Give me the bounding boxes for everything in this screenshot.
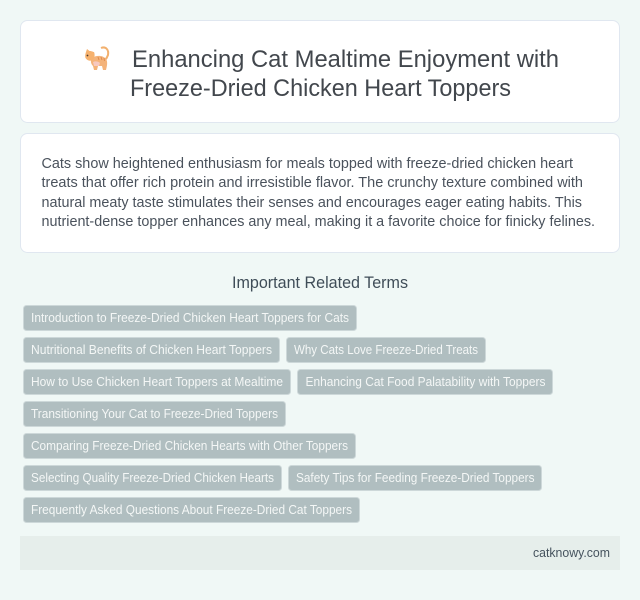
tag (24, 370, 290, 394)
panel: title header (20, 20, 620, 122)
tag (24, 338, 280, 362)
tag list: related terms (24, 306, 552, 522)
tag (24, 306, 356, 330)
summary text: Cats show heightened enthusiasm for meals topped with freeze-dried chicken heart (42, 155, 574, 172)
icon: cat (85, 47, 108, 70)
footer bar (20, 536, 620, 570)
summary text: treats that offer rich protein and irresistible flavor. The crunchy texture combined with (42, 174, 583, 191)
tag: Nutritional Benefits of Chicken Heart Toppers (31, 343, 272, 357)
tag (288, 466, 542, 490)
tag (298, 370, 552, 394)
tag: Frequently Asked Questions About Freeze-Dried Cat Toppers (31, 503, 352, 517)
tag: Enhancing Cat Food Palatability with Toppers (306, 375, 546, 389)
tag (24, 466, 282, 490)
tag (286, 338, 486, 362)
title text (130, 46, 559, 102)
tag: How to Use Chicken Heart Toppers at Mealtime (31, 375, 283, 389)
tag: Introduction to Freeze-Dried Chicken Heart Toppers for Cats (31, 311, 349, 325)
summary text: natural meaty taste stimulates their senses and encourages eager eating habits. This (42, 194, 582, 211)
tag (24, 434, 356, 458)
tag: Selecting Quality Freeze-Dried Chicken Hearts (31, 471, 274, 485)
heading: related terms: Important Related Terms (232, 274, 408, 292)
tag: Comparing Freeze-Dried Chicken Hearts with Other Toppers (31, 439, 348, 453)
tag (24, 498, 360, 522)
tag (24, 402, 286, 426)
title text: Freeze-Dried Chicken Heart Toppers (130, 75, 511, 102)
tag: Transitioning Your Cat to Freeze-Dried Toppers (31, 407, 278, 421)
panel: summary paragraph (20, 134, 620, 252)
tag: Why Cats Love Freeze-Dried Treats (294, 343, 478, 357)
footer source text: catknowy.com (533, 545, 610, 560)
summary text: nutrient-dense topper enhances any meal, making it a favorite choice for finicky felines. (42, 213, 595, 230)
tag: Safety Tips for Feeding Freeze-Dried Toppers (296, 471, 534, 485)
summary text (42, 155, 595, 230)
title text: Enhancing Cat Mealtime Enjoyment with (132, 46, 559, 73)
